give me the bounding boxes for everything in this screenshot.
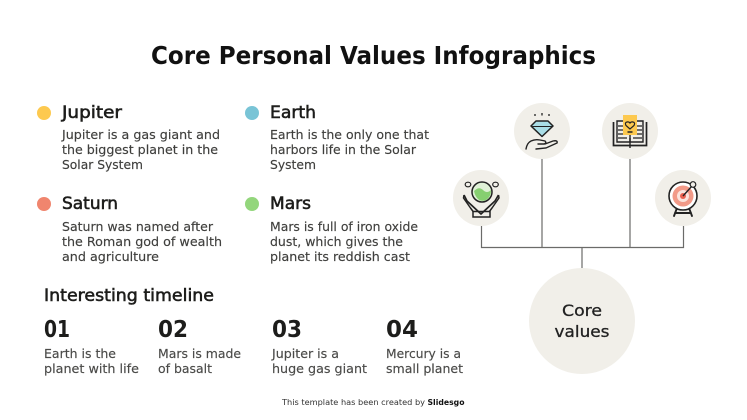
text: Saturn description: Saturn was named after: [62, 220, 213, 234]
node: core values: Core: [562, 301, 602, 320]
timeline item 03: [271, 315, 367, 376]
icon: Jupiter dot: [37, 106, 51, 120]
text: Earth description: [270, 128, 429, 172]
panel: Saturn: [37, 194, 222, 264]
text: Saturn description: and agriculture: [62, 250, 159, 264]
title: Core Personal Values Infographics: [151, 41, 596, 70]
panel: Mars: [245, 194, 418, 264]
text: Jupiter description: the biggest planet in the: [62, 143, 218, 157]
timeline item 03: 03: [272, 315, 302, 343]
text: Jupiter description: Jupiter is a gas giant and: [61, 128, 220, 142]
text: Saturn description: [62, 220, 222, 264]
text: Mars description: planet its reddish cast: [270, 250, 410, 264]
timeline item 04: 04: [386, 315, 418, 343]
text: Earth description: System: [270, 158, 316, 172]
text: Mars description: Mars is full of iron oxide: [270, 220, 418, 234]
text: Jupiter description: [61, 128, 220, 172]
text: Earth description: Earth is the only one that: [270, 128, 429, 142]
panel: Jupiter: [37, 103, 220, 172]
text: Saturn description: the Roman god of wealth: [62, 235, 222, 249]
timeline item 04: small planet: [386, 362, 463, 376]
icon: diamond on hand: [514, 103, 570, 159]
timeline item 03: Jupiter is a: [271, 347, 339, 361]
heading: Interesting timeline: Interesting timeline: [44, 286, 214, 305]
timeline item 01: [44, 315, 139, 376]
heading: Earth: Earth: [270, 103, 316, 122]
text: Jupiter description: Solar System: [62, 158, 143, 172]
icon: target with arrow: [655, 170, 711, 226]
text: Mars description: [270, 220, 418, 264]
icon: open book with heart bulb: [602, 103, 658, 159]
footer credit: This template has been created by: [281, 398, 426, 407]
timeline item 04: [386, 315, 463, 376]
timeline item 02: of basalt: [158, 362, 212, 376]
timeline item 03: huge gas giant: [272, 362, 367, 376]
icon: hands holding globe: [453, 170, 509, 226]
timeline item 02: [158, 315, 241, 376]
timeline item 04: Mercury is a: [386, 347, 461, 361]
text: Earth description: harbors life in the Solar: [270, 143, 416, 157]
connector tree: [482, 159, 684, 270]
text: Mars description: dust, which gives the: [270, 235, 403, 249]
timeline item 02: Mars is made: [158, 347, 241, 361]
heading: Jupiter: Jupiter: [61, 103, 122, 122]
panel: timeline: [44, 286, 463, 376]
footer credit: Slidesgo: [428, 398, 464, 407]
node: core values: [529, 268, 635, 374]
icon: Earth dot: [245, 106, 259, 120]
timeline item 01: 01: [44, 315, 70, 343]
icon: Saturn dot: [37, 197, 51, 211]
heading: Saturn: Saturn: [62, 194, 118, 213]
timeline item 01: planet with life: [44, 362, 139, 376]
panel: Earth: [245, 103, 429, 172]
icon: Mars dot: [245, 197, 259, 211]
timeline item 01: Earth is the: [44, 347, 116, 361]
timeline item 02: 02: [158, 315, 188, 343]
node: core values: values: [554, 322, 610, 341]
heading: Mars: Mars: [270, 194, 311, 213]
